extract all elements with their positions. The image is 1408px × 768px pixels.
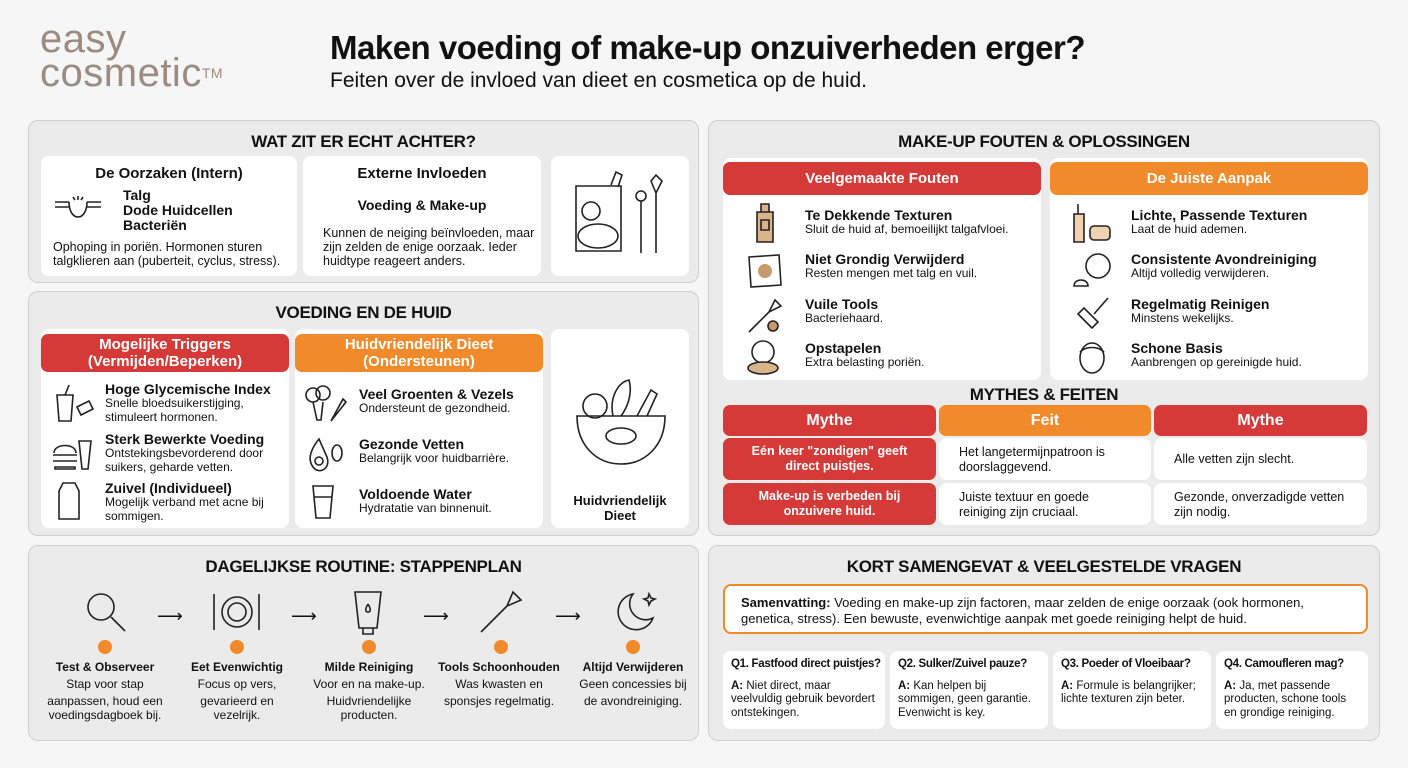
- panel: dagelijkse routine: Voor en na make-up.: [313, 677, 425, 691]
- icon: broccoli: [305, 385, 347, 422]
- card: juiste aanpak: Consistente Avondreiniging: [1131, 251, 1317, 267]
- arrows: ⟶: [157, 606, 183, 626]
- header: triggers: Mogelijke Triggers: [99, 336, 231, 353]
- faq card 2: Q2. Sulker/Zuivel pauze?: [898, 658, 1027, 670]
- card: oorzaken: Talg: [123, 187, 151, 203]
- card: fouten: Vuile Tools: [805, 296, 878, 312]
- icon: magnifier: [87, 593, 126, 632]
- icon: water glass: [312, 485, 334, 519]
- card: icon groceries: [551, 156, 689, 276]
- summary box: Samenvatting: Voeding en make-up zijn factoren, maar zelden de enige oorzaak (ook hormonen, genetica, stress). Een bewuste, evenwichtige aanpak met goede reiniging helpt de huid.: [741, 595, 1304, 626]
- panel: dagelijkse routine: [28, 545, 699, 741]
- card: fouten: Sluit de huid af, bemoeilijkt talgafvloei.: [805, 222, 1008, 236]
- panel: dagelijkse routine: ⟶: [555, 606, 581, 626]
- table: mythes & feiten: Gezonde, onverzadigde vetten zijn nodig.: [1174, 490, 1344, 519]
- heading: WAT ZIT ER ECHT ACHTER?: [251, 132, 476, 151]
- card: juiste aanpak: Regelmatig Reinigen: [1131, 296, 1269, 312]
- faq card 1: Q1. Fastfood direct puistjes?: [731, 658, 881, 670]
- icon: soda: [56, 384, 94, 422]
- table: mythes & feiten: Make-up is verbeden bij: [759, 489, 900, 503]
- card: fouten: Niet Grondig Verwijderd: [805, 251, 964, 267]
- panel: voeding en de huid: [28, 291, 699, 536]
- panel: dagelijkse routine: Geen concessies bij: [579, 677, 687, 691]
- card: triggers: [41, 329, 289, 528]
- card: triggers: Sterk Bewerkte Voeding: [105, 431, 264, 447]
- table: mythes & feiten: Feit: [1031, 412, 1059, 429]
- table: mythes & feiten: direct puistjes.: [785, 459, 874, 473]
- card: fouten: Te Dekkende Texturen: [805, 207, 952, 223]
- card: juiste aanpak: Altijd volledig verwijderen.: [1131, 266, 1269, 280]
- card: juiste aanpak: Lichte, Passende Texturen: [1131, 207, 1307, 223]
- panel: dagelijkse routine: sponsjes regelmatig.: [444, 694, 554, 708]
- panel: dagelijkse routine: Milde Reiniging: [325, 660, 413, 674]
- icon: plate: [213, 594, 260, 630]
- faq card 2: A: Kan helpen bij sommigen, geen garantie. Evenwicht is key.: [898, 680, 1031, 718]
- icon: brush: [480, 590, 522, 633]
- dots: [98, 640, 112, 654]
- summary box: [723, 584, 1368, 634]
- faq card 3: [1053, 651, 1211, 729]
- table: mythes & feiten: Het langetermijnpatroon is doorslaggevend.: [959, 445, 1105, 474]
- card: bowl: [551, 329, 689, 528]
- card: huidvriendelijk: Voldoende Water: [359, 486, 472, 502]
- heading: DAGELIJKSE ROUTINE: STAPPENPLAN: [205, 557, 522, 576]
- card: triggers: Hoge Glycemische Index: [105, 381, 271, 397]
- card: externe invloeden: Kunnen de neiging beïnvloeden, maar zijn zelden de enige oorzaak. Ieder huidtype reageert anders.: [323, 226, 534, 268]
- card: fouten: Bacteriehaard.: [805, 311, 883, 325]
- card: bowl: Huidvriendelijk: [573, 493, 667, 508]
- icon: pore: [55, 196, 101, 218]
- icon: milk: [58, 482, 80, 520]
- faq card 4: [1216, 651, 1368, 729]
- card: huidvriendelijk: Hydratatie van binnenuit.: [359, 501, 492, 515]
- card: fouten: Resten mengen met talg en vuil.: [805, 266, 977, 280]
- heading: VOEDING EN DE HUID: [276, 303, 451, 322]
- icon: burger: [53, 440, 92, 470]
- card: bowl: Dieet: [604, 508, 636, 523]
- panel: dagelijkse routine: gevarieerd en vezelrijk.: [200, 694, 274, 722]
- card: oorzaken: Bacteriën: [123, 217, 187, 233]
- heading: KORT SAMENGEVAT & VEELGESTELDE VRAGEN: [847, 557, 1241, 576]
- step texts: Stap voor stap: [66, 677, 144, 691]
- card: triggers: Snelle bloedsuikerstijging, stimuleert hormonen.: [105, 396, 244, 424]
- header: aanpak: [1050, 162, 1368, 195]
- card: juiste aanpak: Schone Basis: [1131, 340, 1223, 356]
- card: huidvriendelijk: Gezonde Vetten: [359, 436, 464, 452]
- icon: avocado: [309, 438, 343, 472]
- logo: [40, 17, 223, 95]
- step texts: Test & Observeer: [56, 660, 154, 674]
- icon: salad bowl: [576, 379, 666, 465]
- card: fouten: [723, 158, 1041, 380]
- step texts: [47, 660, 163, 722]
- card: externe invloeden: Voeding & Make-up: [358, 197, 486, 213]
- icon: tube: [354, 591, 382, 635]
- table: mythes & feiten: Mythe: [806, 412, 853, 429]
- header: fouten: Veelgemaakte Fouten: [805, 170, 959, 187]
- card: oorzaken: Ophoping in poriën. Hormonen sturen talgklieren aan (puberteit, cyclus, stress).: [53, 240, 280, 268]
- card: juiste aanpak: [1050, 158, 1368, 380]
- card: externe invloeden: [303, 156, 541, 276]
- card: juiste aanpak: Minstens wekelijks.: [1131, 311, 1234, 325]
- card: externe invloeden: Externe Invloeden: [357, 165, 487, 182]
- panel: dagelijkse routine: ⟶: [291, 606, 317, 626]
- header: fouten: [723, 162, 1041, 195]
- panel: samenvatting & FAQ: [708, 545, 1380, 741]
- card: fouten: Opstapelen: [805, 340, 881, 356]
- faq card 3: Q3. Poeder of Vloeibaar?: [1061, 658, 1191, 670]
- card: triggers: Zuivel (Individueel): [105, 480, 232, 496]
- header: triggers: [41, 334, 289, 372]
- card: fouten: Extra belasting poriën.: [805, 355, 924, 369]
- step texts: aanpassen, houd een voedingsdagboek bij.: [47, 694, 163, 722]
- heading: MAKE-UP FOUTEN & OPLOSSINGEN: [898, 132, 1190, 151]
- card: oorzaken: De Oorzaken (Intern): [95, 165, 243, 182]
- header: dieet: (Ondersteunen): [363, 353, 475, 370]
- subtitle: Feiten over de invloed van dieet en cosmetica op de huid.: [330, 69, 867, 92]
- table: mythes & feiten: onzuivere huid.: [784, 504, 875, 518]
- header: dieet: [295, 334, 543, 372]
- table: mythes & feiten: Juiste textuur en goede reiniging zijn cruciaal.: [959, 490, 1089, 519]
- card: huidvriendelijk: Veel Groenten & Vezels: [359, 386, 514, 402]
- panel: dagelijkse routine: Huidvriendelijke producten.: [327, 694, 411, 722]
- panel: dagelijkse routine: Eet Evenwichtig: [191, 660, 283, 674]
- table: mythes & feiten: [723, 405, 1367, 525]
- title: Maken voeding of make-up onzuiverheden erger?: [330, 29, 1085, 66]
- panel: dagelijkse routine: ⟶: [423, 606, 449, 626]
- icon: moon: [617, 592, 658, 630]
- table: mythes & feiten: Alle vetten zijn slecht.: [1174, 452, 1294, 466]
- panel: dagelijkse routine: Focus op vers,: [198, 677, 276, 691]
- heading: mythes: MYTHES & FEITEN: [970, 385, 1118, 404]
- table: mythes & feiten: Eén keer "zondigen" geeft: [752, 444, 907, 458]
- logo: easy: [40, 17, 126, 61]
- card: oorzaken: Dode Huidcellen: [123, 202, 233, 218]
- card: huidvriendelijk: Belangrijk voor huidbarrière.: [359, 451, 509, 465]
- logo: cosmeticTM: [40, 51, 223, 95]
- panel: dagelijkse routine: Altijd Verwijderen: [583, 660, 683, 674]
- faq card 4: A: Ja, met passende producten, schone tools en grondige reiniging.: [1224, 680, 1346, 718]
- panel: wat zit er echt achter: [28, 120, 699, 283]
- header: dieet: Huidvriendelijk Dieet: [345, 336, 493, 353]
- table: mythes & feiten: Mythe: [1237, 412, 1284, 429]
- faq card 1: A: Niet direct, maar veelvuldig gebruik bevordert ontstekingen.: [731, 680, 875, 718]
- card: huidvriendelijk: [295, 329, 543, 528]
- card: oorzaken: [41, 156, 297, 276]
- panel: dagelijkse routine: Tools Schoonhouden: [438, 660, 560, 674]
- header: aanpak: De Juiste Aanpak: [1147, 170, 1271, 187]
- panel: dagelijkse routine: Was kwasten en: [455, 677, 543, 691]
- card: juiste aanpak: Laat de huid ademen.: [1131, 222, 1247, 236]
- card: juiste aanpak: Aanbrengen op gereinigde huid.: [1131, 355, 1302, 369]
- header: triggers: (Vermijden/Beperken): [88, 353, 242, 370]
- card: triggers: Mogelijk verband met acne bij sommigen.: [105, 495, 264, 523]
- faq card 3: A: Formule is belangrijker; lichte texturen zijn beter.: [1061, 680, 1196, 705]
- faq card 1: [723, 651, 885, 729]
- faq card 2: [890, 651, 1048, 729]
- panel: dagelijkse routine: de avondreiniging.: [584, 694, 682, 708]
- panel: make-up fouten: [708, 120, 1380, 536]
- card: huidvriendelijk: Ondersteunt de gezondheid.: [359, 401, 510, 415]
- card: triggers: Ontstekingsbevorderend door suikers, geharde vetten.: [105, 446, 263, 474]
- faq card 4: Q4. Camoufleren mag?: [1224, 658, 1344, 670]
